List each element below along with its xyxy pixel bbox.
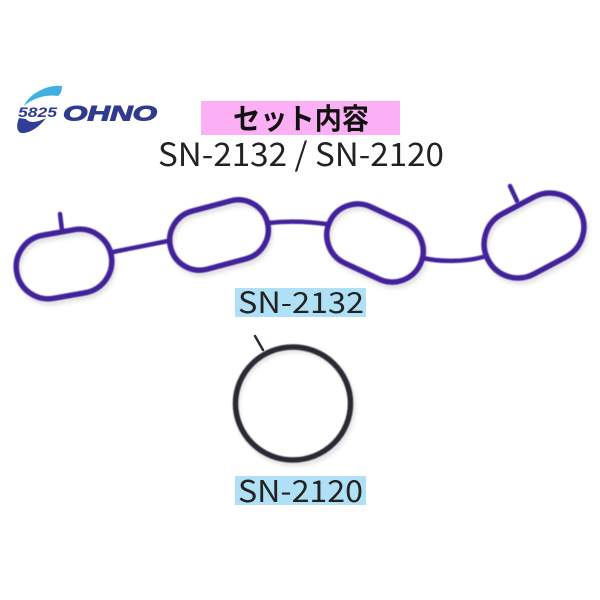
port 4 bbox=[472, 181, 596, 290]
purple manifold gasket SN-2132 bbox=[11, 181, 598, 308]
logo number 5825: 5825 bbox=[18, 104, 57, 120]
logo: OHNO bbox=[17, 86, 157, 133]
ring tab bbox=[255, 336, 263, 350]
part numbers heading: SN-2132 / SN-2120 bbox=[158, 130, 444, 176]
port 3 bbox=[317, 194, 433, 292]
black round gasket SN-2120 bbox=[236, 336, 353, 464]
label: SN-2132: SN-2132 bbox=[238, 280, 364, 322]
ring body bbox=[236, 347, 350, 460]
heading box: set contents: セット内容 bbox=[233, 96, 369, 138]
label: SN-2120: SN-2120 bbox=[238, 467, 363, 511]
ring shadow bbox=[237, 350, 353, 464]
gasket connectors and tabs bbox=[60, 186, 517, 261]
logo wordmark: OHNO bbox=[63, 102, 157, 126]
gasket body bbox=[11, 181, 596, 304]
port 1 bbox=[11, 224, 117, 304]
logo swoosh top bbox=[24, 86, 62, 106]
port 2 bbox=[163, 193, 275, 277]
logo swoosh bottom bbox=[17, 118, 46, 133]
gasket shadow bbox=[13, 185, 598, 308]
